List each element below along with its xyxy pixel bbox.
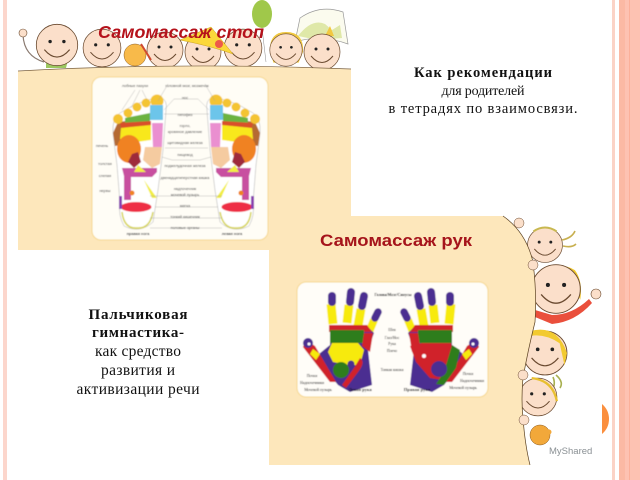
heading: foot self-massage: Самомассаж стоп [98, 22, 264, 42]
hand chart labels: Рука [388, 342, 396, 346]
foot chart labels: толстая [98, 162, 112, 166]
right border stripes [612, 0, 640, 480]
right foot [207, 94, 260, 229]
foot chart [92, 77, 268, 240]
foot chart labels: нос [182, 96, 188, 100]
right hand [404, 292, 479, 392]
foot chart labels: головной мозг, мозжечок [165, 84, 209, 88]
text block: finger gymnastics: активизации речи [76, 381, 200, 398]
illustration: children beside the hand panel [519, 228, 601, 445]
illustration: children above the panel [19, 0, 348, 70]
text block: recommendations: для родителей [442, 84, 525, 99]
hands gripping panel edge [514, 218, 538, 425]
panel: foot self-massage [18, 66, 351, 250]
hand chart labels: Плечо [387, 349, 397, 353]
foot chart labels: левая нога [222, 232, 243, 236]
panel: hand self-massage [269, 216, 538, 465]
hat kid [295, 9, 348, 70]
foot chart labels: нервы [99, 189, 111, 193]
heading: hand self-massage: Самомассаж рук [320, 231, 473, 250]
foot chart labels: щитовидная железа [167, 141, 204, 145]
hand chart [297, 282, 488, 397]
orange tab marker [602, 404, 609, 434]
foot chart labels: пищевод [177, 153, 194, 157]
foot chart labels: тонкий кишечник [170, 215, 200, 219]
hand chart labels: Надпочечники [300, 381, 324, 385]
foot chart labels: горло, [180, 124, 190, 128]
foot chart labels: поджелудочная железа [165, 164, 206, 168]
waving arm [23, 35, 44, 62]
text block: finger gymnastics: развития и [101, 362, 175, 379]
hand chart labels: Глаз/Нос [385, 336, 400, 340]
foot chart labels [96, 84, 243, 236]
background card [269, 216, 536, 465]
hand chart labels: Почки [307, 374, 317, 378]
hand chart labels: Голова/Мозг/Синусы [374, 293, 412, 297]
hand chart labels: Почки [463, 372, 473, 376]
hand chart labels: Тонкая кишка [381, 368, 404, 372]
MyShared watermark: MyShared [549, 446, 592, 457]
hand chart labels: Левая рука [348, 387, 372, 392]
foot chart labels: мочевой пузырь [171, 193, 199, 197]
hand chart labels: Мочевой пузырь [449, 386, 477, 390]
hand chart labels: Шея [388, 328, 396, 332]
foot chart labels: лобные пазухи [122, 84, 148, 88]
text block: recommendations [388, 65, 578, 117]
text block: finger gymnastics: Пальчиковая [88, 307, 188, 323]
text block: finger gymnastics [76, 307, 200, 398]
background card [18, 66, 351, 250]
foot chart labels: гипофиз [178, 113, 193, 117]
foot chart labels: половые органы [171, 226, 200, 230]
foot chart labels: матка [180, 204, 191, 208]
left hand [303, 292, 378, 392]
foot chart labels: слепая [99, 174, 111, 178]
text block: recommendations: в тетрадях по взаимосвязи. [388, 101, 578, 117]
balloon [252, 0, 272, 62]
hand chart labels: Мочевой пузырь [304, 388, 332, 392]
foot chart labels: печень [96, 144, 108, 148]
left foot [113, 94, 166, 229]
foot chart labels: правая нога [127, 232, 150, 236]
hand chart labels [300, 293, 484, 392]
hand chart labels: Правая рука [404, 387, 431, 392]
foot chart labels: двенадцатиперстная кишка [161, 176, 210, 180]
text block: finger gymnastics: гимнастика- [92, 325, 184, 341]
connector lines [122, 84, 222, 228]
text block: finger gymnastics: как средство [95, 343, 181, 360]
left border stripes [3, 0, 7, 480]
hand chart labels: Надпочечники [460, 379, 484, 383]
text block: recommendations: Как рекомендации [414, 65, 552, 81]
foot chart labels: надпочечник [174, 187, 196, 191]
foot chart labels: кровяное давление [168, 130, 202, 134]
